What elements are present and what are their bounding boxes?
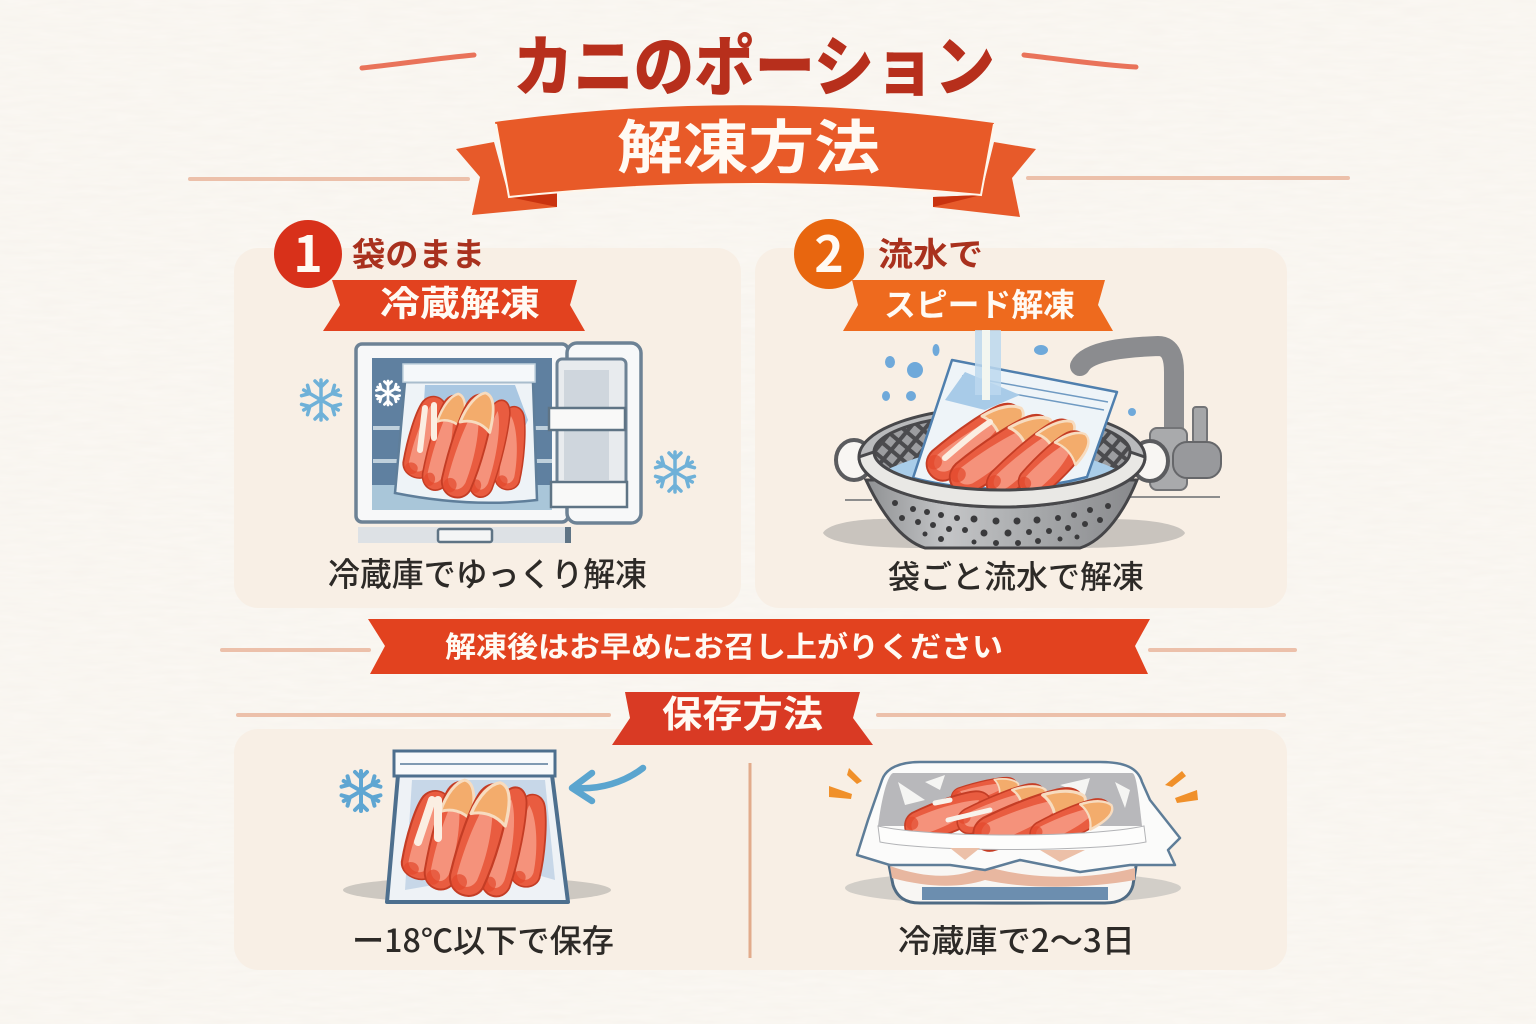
crab portions in bag	[919, 392, 1096, 505]
shadow under colander	[823, 519, 1185, 548]
caption: thaw slowly in fridge: 冷蔵庫でゆっくり解凍	[328, 548, 647, 596]
main ribbon: thawing method	[456, 101, 1036, 217]
tap	[1080, 346, 1221, 490]
title brush stroke left	[362, 55, 474, 68]
icon: snowflake right of fridge	[655, 452, 695, 492]
tray rim and parchment paper back	[857, 762, 1180, 872]
panel: method 1 background	[234, 248, 741, 608]
illustration: crab bag in colander under tap	[823, 330, 1221, 548]
accent marks left of tray	[829, 768, 862, 799]
tilted bag	[913, 360, 1117, 489]
colander holes	[892, 500, 1111, 546]
crab portions in frozen bag	[398, 776, 549, 901]
heading text: in the bag: 袋のまま	[352, 228, 485, 276]
title: カニのポーション	[513, 14, 995, 110]
water stream	[975, 330, 1001, 400]
icon: snowflake beside frozen bag	[341, 771, 381, 811]
tray front rim	[878, 826, 1146, 850]
number badge 2	[794, 215, 864, 289]
colander back rim and mesh	[859, 407, 1145, 507]
illustration: open fridge with bag of crab	[356, 343, 641, 543]
caption: thaw under running water in bag: 袋ごと流水で解凍	[888, 552, 1144, 598]
number badge 2: 2	[814, 215, 844, 287]
method 1 heading	[274, 215, 485, 288]
ribbon: eat soon after thawing	[368, 619, 1150, 674]
colander front rim	[859, 452, 1145, 507]
crab portions in tray	[900, 772, 1117, 858]
parchment folds	[950, 848, 1085, 862]
title brush stroke right	[1024, 55, 1136, 67]
ribbon: speed thawing: スピード解凍	[884, 280, 1075, 326]
colander handles	[836, 440, 1168, 481]
bag with crab portions	[395, 364, 537, 503]
ribbon: speed thawing	[843, 280, 1113, 331]
accent marks right of tray	[1165, 771, 1198, 803]
ribbon: storage method: 保存方法	[662, 684, 823, 738]
water droplets	[882, 344, 1136, 416]
ribbon: storage method	[612, 684, 873, 745]
ribbon: eat soon after thawing: 解凍後はお早めにお召し上がりください	[445, 624, 1003, 666]
heading text: under running water: 流水で	[878, 228, 983, 276]
ribbon: refrigerator thawing	[323, 276, 585, 331]
method 2 heading	[794, 215, 983, 289]
panel: storage background	[234, 729, 1287, 970]
arrow pointing to frozen bag	[572, 768, 643, 801]
decorative brush lines	[190, 178, 1348, 715]
divider between storage options	[748, 763, 752, 958]
icon: snowflake left of fridge	[301, 380, 341, 420]
ribbon heading: 解凍方法	[617, 101, 880, 185]
ribbon: refrigerator thawing: 冷蔵解凍	[380, 276, 540, 327]
caption: 2 to 3 days in fridge: 冷蔵庫で2〜3日	[898, 916, 1135, 962]
colander body	[866, 480, 1137, 548]
panel: method 2 background	[755, 248, 1287, 608]
icon: white snowflake inside fridge	[376, 381, 400, 405]
illustration: crab in refrigerated tray	[845, 762, 1181, 905]
number badge 1	[274, 215, 342, 288]
caption: store below -18 degrees: ー18℃以下で保存	[352, 916, 614, 962]
illustration: frozen bag of crab	[343, 751, 611, 903]
number badge 1: 1	[293, 215, 323, 287]
